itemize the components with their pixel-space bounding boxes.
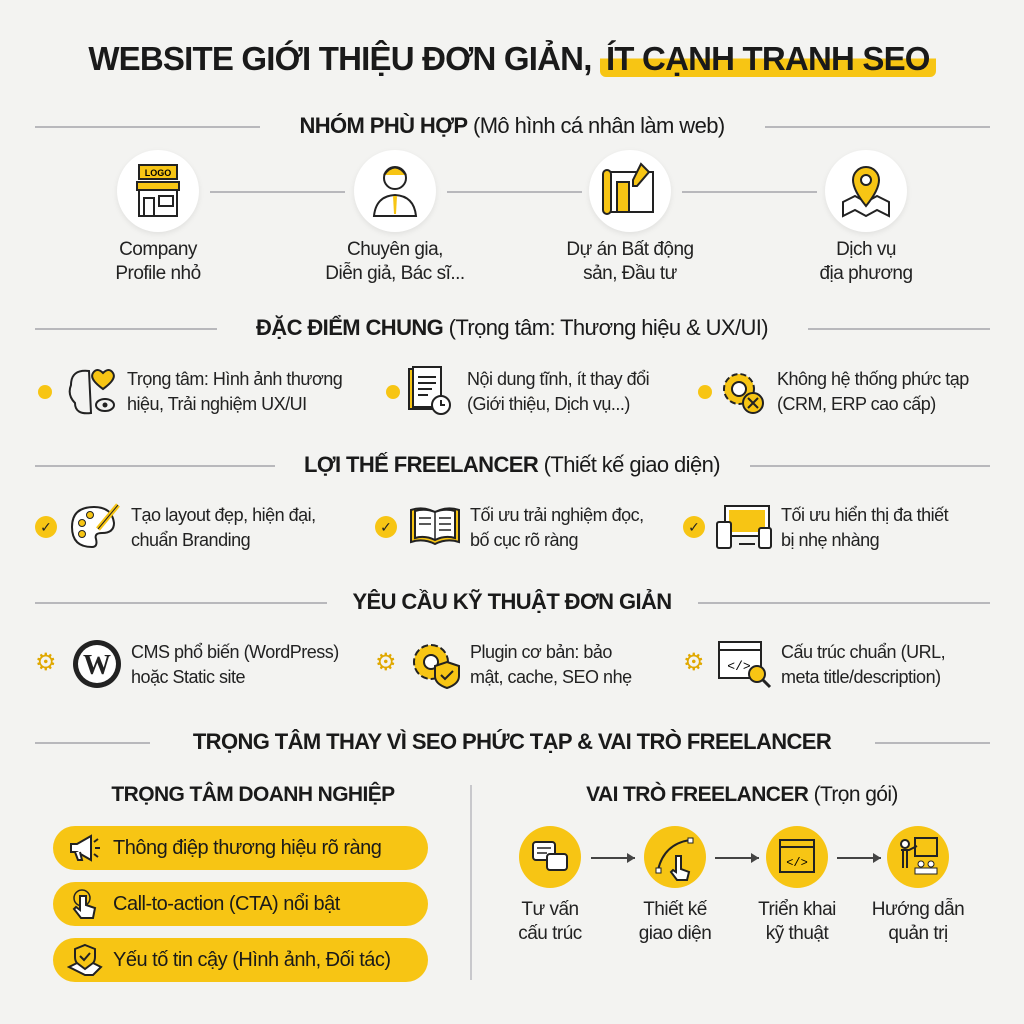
- panel: freelancer process: giao diện: [639, 923, 711, 944]
- panel: freelancer advantages: Tối ưu hiển thị đa thiết: [781, 505, 948, 525]
- icon: gear x: [723, 373, 764, 414]
- heading: nhóm phù hợp: NHÓM PHÙ HỢP (Mô hình cá nhân làm web): [299, 113, 725, 138]
- labels: Tư vấn: [521, 899, 579, 920]
- title: WEBSITE GIỚI THIỆU ĐƠN GIẢN, ÍT CẠNH TRANH SEO: [88, 40, 930, 77]
- icon: devices: [716, 505, 772, 549]
- label: real estate: [566, 239, 694, 284]
- heading: lợi thế freelancer: LỢI THẾ FREELANCER (Thiết kế giao diện): [304, 452, 720, 477]
- icon: brain heart: [68, 369, 115, 414]
- panel: technical requirements: Cấu trúc chuẩn (URL,: [781, 642, 945, 662]
- panel: technical requirements: CMS phổ biến (WordPress): [131, 642, 339, 662]
- panel: technical requirements: mật, cache, SEO nhẹ: [470, 667, 632, 687]
- panel: technical requirements: Plugin cơ bản: bảo: [470, 642, 612, 662]
- pill: message: Thông điệp thương hiệu rõ ràng: [113, 837, 381, 859]
- heading: yêu cầu kỹ thuật: YÊU CẦU KỸ THUẬT ĐƠN GIẢN: [352, 589, 672, 614]
- panel: freelancer process: Hướng dẫn: [872, 899, 964, 920]
- panel: freelancer advantages: bố cục rõ ràng: [470, 530, 578, 550]
- icon: wordpress: W: [83, 650, 111, 681]
- panel: freelancer advantages: bị nhẹ nhàng: [781, 530, 879, 550]
- icon: blueprint: [589, 150, 671, 232]
- pill: trust: [53, 938, 428, 982]
- panel: freelancer advantages: ✓: [40, 519, 52, 535]
- panel: characteristics: [38, 366, 969, 415]
- panel: characteristics: Trọng tâm: Hình ảnh thương: [127, 369, 342, 389]
- label: real estate: Dự án Bất động: [566, 239, 694, 260]
- panel: freelancer advantages: [35, 503, 948, 550]
- heading: đặc điểm chung: ĐẶC ĐIỂM CHUNG (Trọng tâm: Thương hiệu & UX/UI): [256, 315, 768, 340]
- label: company: [115, 239, 201, 284]
- label: expert: Diễn giả, Bác sĩ...: [325, 263, 465, 284]
- labels: [518, 899, 582, 944]
- icon: document clock: [408, 366, 451, 415]
- panel: freelancer process: Triển khai: [758, 899, 836, 920]
- panel: characteristics: hiệu, Trải nghiệm UX/UI: [127, 394, 307, 414]
- icon: shop: LOGO: [145, 168, 171, 178]
- label: local: địa phương: [819, 263, 913, 284]
- panel: freelancer advantages: Tạo layout đẹp, hiện đại,: [131, 505, 316, 525]
- panel: technical requirements: [35, 640, 945, 689]
- panel: technical requirements: ⚙: [375, 649, 397, 676]
- panel: freelancer process: kỹ thuật: [766, 923, 828, 944]
- icon: palette: [71, 503, 120, 548]
- labels: cấu trúc: [518, 923, 582, 944]
- label: company: Company: [119, 239, 197, 260]
- icon: location: [825, 150, 907, 232]
- panel: characteristics: (CRM, ERP cao cấp): [777, 394, 936, 414]
- panel: characteristics: Không hệ thống phức tạp: [777, 369, 969, 389]
- subheading: TRỌNG TÂM DOANH NGHIỆP: [111, 783, 395, 806]
- icon: book: [410, 507, 460, 546]
- step: guide: [887, 826, 949, 888]
- label: real estate: sản, Đầu tư: [583, 263, 677, 284]
- panel: freelancer advantages: ✓: [688, 519, 700, 535]
- panel: freelancer advantages: chuẩn Branding: [131, 530, 250, 550]
- panel: technical requirements: hoặc Static site: [131, 667, 245, 687]
- icon: shop: [117, 150, 199, 232]
- panel: freelancer process: quản trị: [888, 923, 948, 944]
- panel: technical requirements: meta title/description): [781, 667, 941, 687]
- icon: code search: </>: [727, 659, 751, 674]
- label: expert: [325, 239, 465, 284]
- panel: freelancer advantages: Tối ưu trải nghiệm đọc,: [470, 505, 644, 525]
- step: consult: [519, 826, 581, 888]
- subheading: vai trò freelancer: VAI TRÒ FREELANCER (Trọn gói): [586, 783, 898, 806]
- label: expert: Chuyên gia,: [347, 239, 443, 260]
- panel: characteristics: Nội dung tĩnh, ít thay đổi: [467, 369, 649, 389]
- label: local: Dịch vụ: [836, 239, 896, 260]
- icon: small gear: ⚙: [35, 649, 57, 676]
- panel: freelancer process: [518, 826, 964, 944]
- panel: characteristics: (Giới thiệu, Dịch vụ...): [467, 394, 630, 414]
- icon: gear shield: [413, 644, 460, 689]
- panel: technical requirements: ⚙: [683, 649, 705, 676]
- pill: cta: Call-to-action (CTA) nổi bật: [113, 893, 340, 915]
- icon: code search: [718, 641, 771, 688]
- pill: message: [53, 826, 428, 870]
- label: company: Profile nhỏ: [115, 263, 201, 284]
- icon: expert: [354, 150, 436, 232]
- icon: wordpress: [73, 640, 121, 688]
- pill: trust: Yếu tố tin cậy (Hình ảnh, Đối tác): [113, 949, 391, 971]
- step: design: [644, 826, 706, 888]
- step: deploy: [766, 826, 828, 888]
- label: local: [819, 239, 913, 284]
- panel: freelancer advantages: ✓: [380, 519, 392, 535]
- panel: groups: [115, 150, 913, 284]
- heading: trọng tâm & vai trò: TRỌNG TÂM THAY VÌ SEO PHỨC TẠP & VAI TRÒ FREELANCER: [193, 729, 831, 754]
- step: deploy: </>: [786, 856, 808, 870]
- pill: cta: [53, 882, 428, 926]
- panel: freelancer process: Thiết kế: [643, 899, 707, 920]
